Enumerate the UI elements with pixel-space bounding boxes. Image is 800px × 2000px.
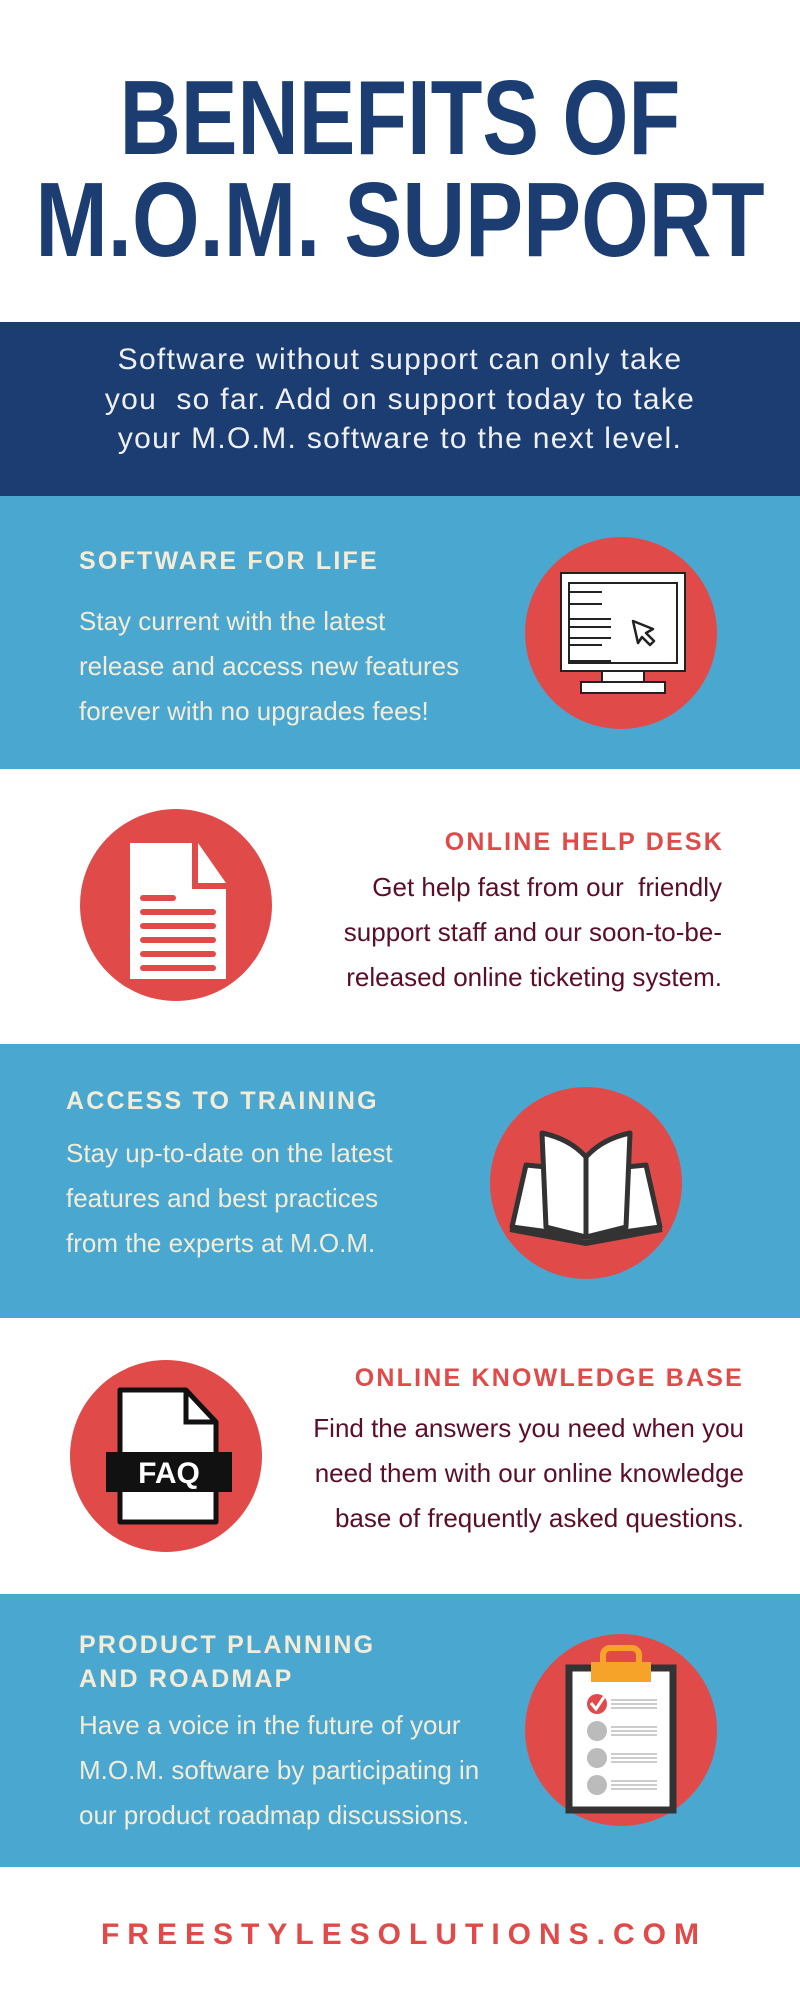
panel: software for life [0, 496, 800, 769]
panel: access to training [0, 1044, 800, 1318]
body text: need them with our online knowledge [315, 1458, 744, 1488]
body text: M.O.M. software by participating in [79, 1755, 479, 1785]
heading: ONLINE HELP DESK [445, 828, 724, 856]
panel: product planning and roadmap [0, 1594, 800, 1867]
body text: Stay current with the latest [79, 606, 385, 636]
body text [79, 1710, 479, 1830]
body text: released online ticketing system. [346, 962, 722, 992]
body text: Stay up-to-date on the latest [66, 1138, 393, 1168]
heading: AND ROADMAP [79, 1665, 293, 1693]
heading: PRODUCT PLANNING [79, 1631, 375, 1659]
icon: computer [525, 537, 717, 729]
body text: Find the answers you need when you [313, 1413, 744, 1443]
body text [79, 606, 459, 726]
body text: support staff and our soon-to-be- [344, 917, 722, 947]
panel: online help desk [80, 809, 724, 1001]
body text: Get help fast from our friendly [372, 872, 722, 902]
icon: FAQ file: FAQ [138, 1457, 200, 1490]
body text: Have a voice in the future of your [79, 1710, 461, 1740]
panel: online knowledge base [70, 1360, 744, 1552]
footer url: FREESTYLESOLUTIONS.COM [101, 1918, 707, 1951]
body text: from the experts at M.O.M. [66, 1228, 375, 1258]
intro banner [0, 322, 800, 496]
intro text: your M.O.M. software to the next level. [118, 422, 682, 455]
intro text: you so far. Add on support today to take [105, 382, 695, 416]
title: M.O.M. SUPPORT [35, 161, 765, 279]
title: BENEFITS OF [120, 59, 680, 177]
body text: base of frequently asked questions. [335, 1503, 744, 1533]
title [35, 59, 765, 279]
heading: ACCESS TO TRAINING [66, 1087, 379, 1115]
body text [66, 1138, 393, 1258]
heading: ONLINE KNOWLEDGE BASE [355, 1364, 744, 1392]
intro text [105, 343, 695, 455]
icon: document [80, 809, 272, 1001]
icon: clipboard [525, 1634, 717, 1826]
icon: open book [490, 1087, 682, 1279]
body text [313, 1413, 744, 1533]
heading [79, 1631, 375, 1693]
heading: SOFTWARE FOR LIFE [79, 547, 379, 575]
intro text: Software without support can only take [118, 343, 682, 376]
body text: our product roadmap discussions. [79, 1800, 469, 1830]
body text [344, 872, 722, 992]
body text: features and best practices [66, 1183, 378, 1213]
icon: FAQ file [70, 1360, 262, 1552]
body text: release and access new features [79, 651, 459, 681]
body text: forever with no upgrades fees! [79, 696, 429, 726]
